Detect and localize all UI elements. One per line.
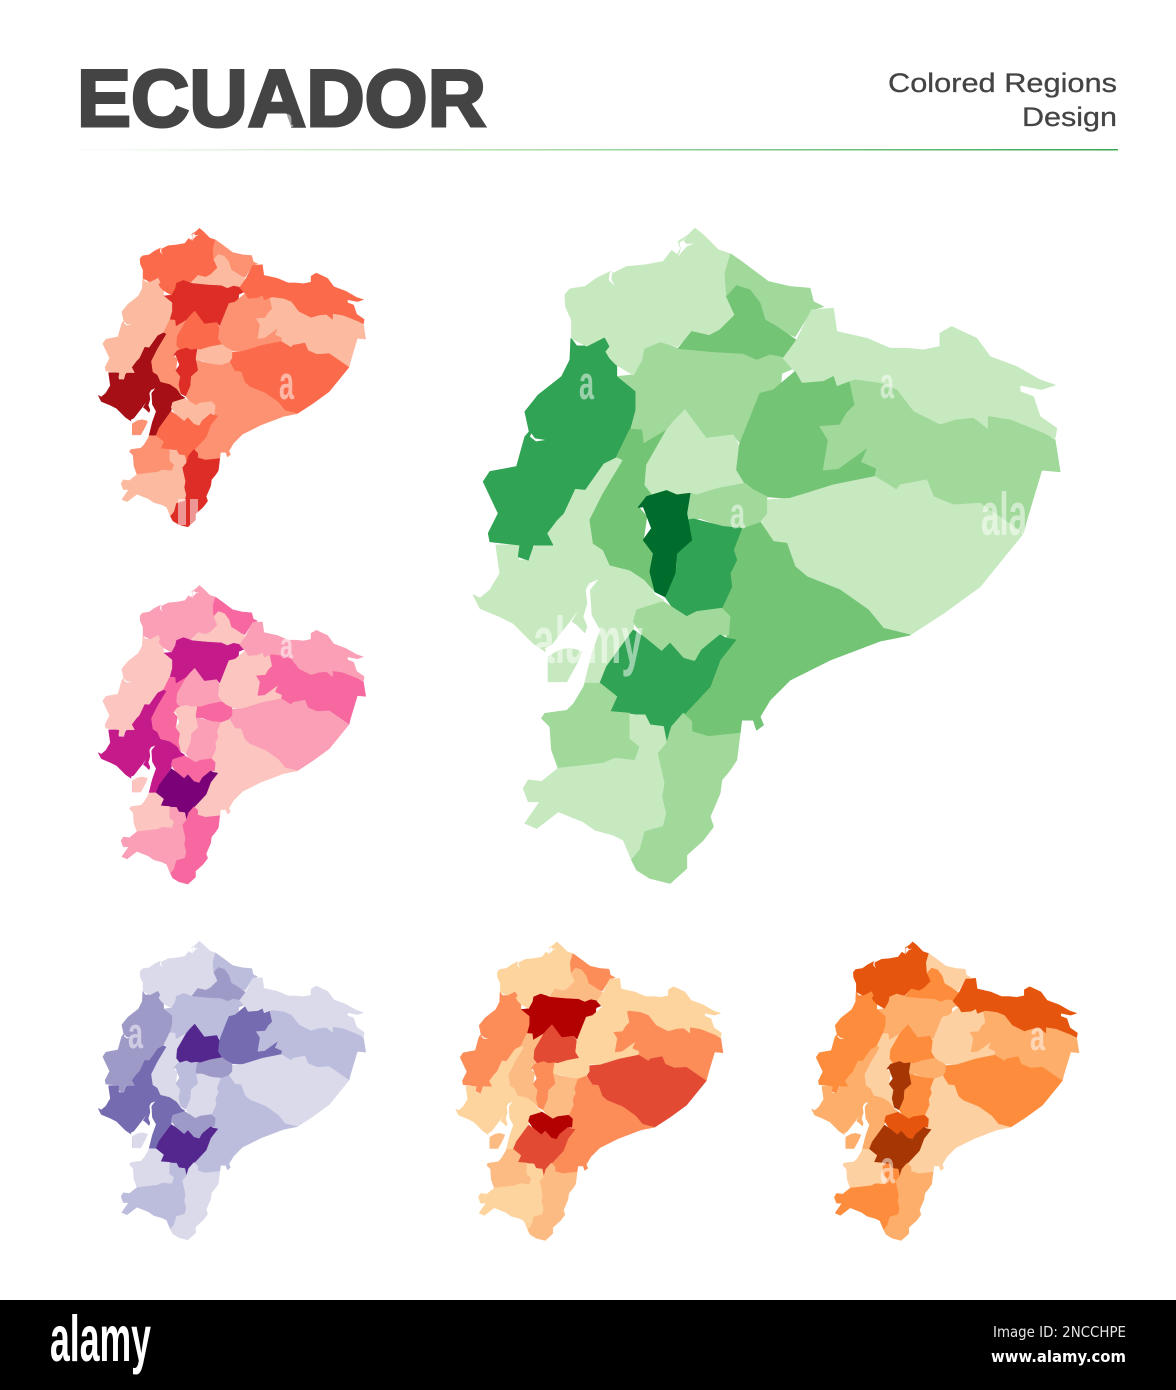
- watermarks: a: [730, 489, 745, 538]
- watermarks: a: [579, 356, 594, 409]
- small map: red: [98, 228, 366, 527]
- watermarks: a: [280, 106, 294, 133]
- watermarks: a: [880, 359, 894, 408]
- watermarks: alamy: [533, 603, 643, 677]
- subtitle: Design: [1022, 102, 1117, 132]
- small map: orange: [812, 942, 1079, 1240]
- gulf: [542, 579, 600, 713]
- watermarks: a: [280, 625, 294, 666]
- title: ECUADOR: [77, 54, 486, 144]
- watermarks: [128, 106, 1045, 1193]
- small map: pink: [98, 585, 366, 884]
- image id: Image ID: 2NCCHPE: [993, 1323, 1126, 1341]
- watermarks: a: [128, 1009, 143, 1058]
- watermarks: a: [1030, 1012, 1045, 1059]
- website: www.alamy.com: [991, 1347, 1126, 1366]
- footer bar: [0, 1300, 1176, 1390]
- small map: orange-red: [456, 942, 723, 1240]
- subtitle: Colored Regions: [888, 68, 1117, 98]
- watermarks: a: [279, 356, 294, 409]
- watermarks: a: [880, 1141, 895, 1193]
- subtitle: [888, 68, 1117, 132]
- darkest region: [638, 491, 692, 597]
- watermarks: ala: [981, 481, 1027, 548]
- alamy logo: alamy: [50, 1302, 151, 1375]
- small map: purple: [98, 941, 366, 1240]
- large map: green: [473, 228, 1060, 883]
